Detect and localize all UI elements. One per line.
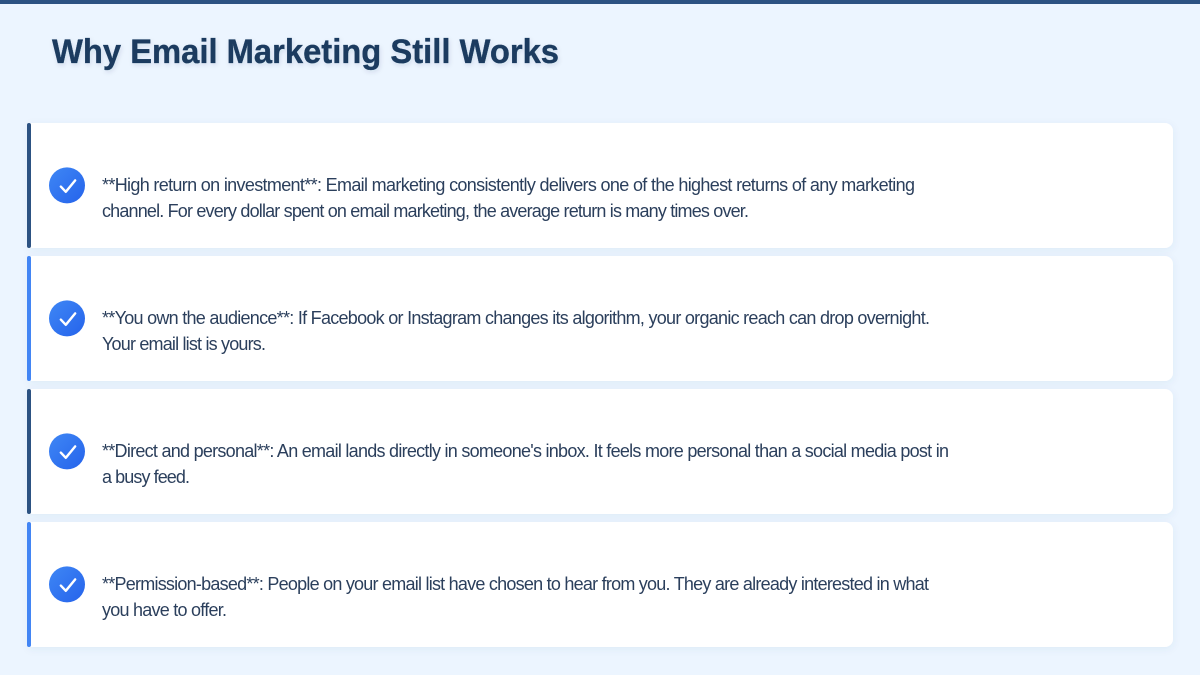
panel: high return on investment — [27, 123, 1173, 248]
icon: check mark — [49, 433, 85, 469]
icon: check mark — [49, 566, 85, 602]
text: high return on investment — [102, 175, 915, 221]
text: you own the audience: Your email list is yours. — [102, 334, 266, 354]
icon: check mark — [49, 300, 85, 336]
card accent bar — [27, 256, 31, 381]
panel: you own the audience — [27, 256, 1173, 381]
text: permission-based: **Permission-based**: People on your email list have chosen to hear from you. They are already interested in what — [102, 574, 929, 594]
panel: direct and personal — [27, 389, 1173, 514]
top accent bar — [0, 0, 1200, 4]
text: high return on investment: channel. For every dollar spent on email marketing, the average return is many times over. — [102, 201, 749, 221]
card accent bar — [27, 522, 31, 647]
panel: permission-based — [27, 522, 1173, 647]
text: you own the audience — [102, 308, 930, 354]
text: direct and personal: **Direct and personal**: An email lands directly in someone's inbox. It feels more personal than a social media post in — [102, 441, 949, 461]
icon: check mark — [49, 167, 85, 203]
text: permission-based — [102, 574, 929, 620]
title: Why Email Marketing Still Works — [52, 33, 559, 71]
text: permission-based: you have to offer. — [102, 600, 227, 620]
card accent bar — [27, 389, 31, 514]
text: direct and personal — [102, 441, 949, 487]
text: high return on investment: **High return on investment**: Email marketing consistently delivers one of the highest returns of any marketing — [102, 175, 915, 195]
text: you own the audience: **You own the audience**: If Facebook or Instagram changes its algorithm, your organic reach can drop overnight. — [102, 308, 930, 328]
card accent bar — [27, 123, 31, 248]
text: direct and personal: a busy feed. — [102, 467, 190, 487]
